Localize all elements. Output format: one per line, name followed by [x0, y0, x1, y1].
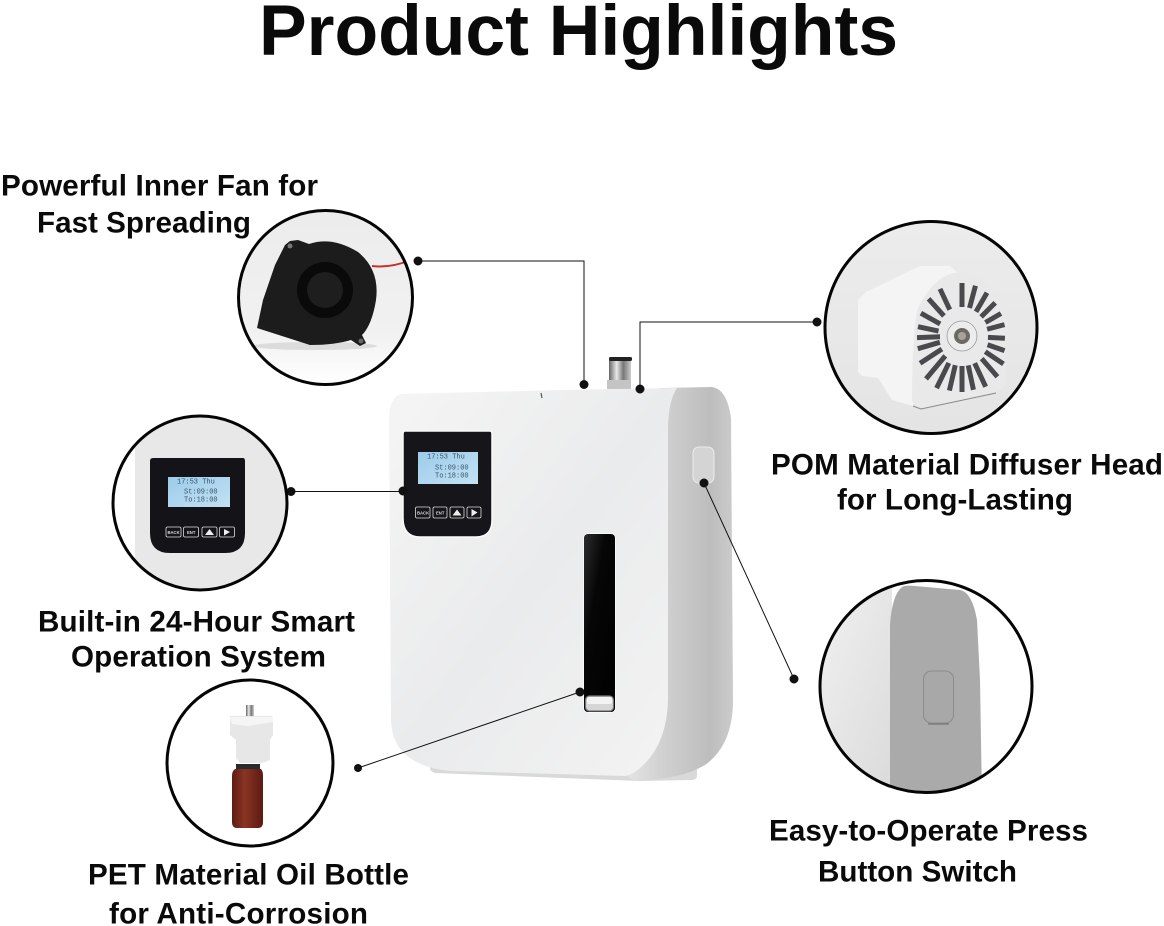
product: scent diffuser machine	[389, 357, 733, 781]
label: smart operation system: Built-in 24-Hour Smart	[38, 606, 355, 638]
control panel: BACK	[417, 510, 429, 516]
icon: control panel circle: ENT	[187, 530, 196, 535]
label: diffuser head	[771, 448, 1163, 516]
bottle assembly	[230, 705, 273, 828]
top seam mark	[541, 393, 542, 398]
label: oil bottle: PET Material Oil Bottle	[88, 858, 409, 892]
front face	[389, 388, 677, 776]
icon: control panel circle: BACK	[168, 530, 180, 535]
label: smart operation system: Operation System	[71, 640, 326, 674]
connector: diffuser head to nozzle	[636, 318, 821, 393]
label: diffuser head: for Long-Lasting	[837, 484, 1073, 516]
icon: oil bottle circle	[167, 680, 333, 846]
control panel	[403, 431, 492, 537]
label: oil bottle	[88, 858, 409, 926]
icon: press button switch circle	[810, 575, 1032, 800]
icon: control panel circle: 17:53 Thu	[177, 478, 215, 486]
base shadow line	[913, 393, 996, 409]
slotted face	[912, 272, 960, 402]
head body	[858, 266, 960, 406]
metal air nozzle	[607, 357, 632, 389]
icon: blower fan circle	[238, 210, 412, 384]
connector: control system to panel	[287, 487, 407, 496]
label: press button: Easy-to-Operate Press	[769, 814, 1088, 848]
label: inner fan: Fast Spreading	[37, 206, 251, 240]
connector: oil bottle to window	[354, 688, 584, 772]
side wall	[620, 387, 733, 780]
control panel: To:18:00	[435, 472, 469, 480]
oil level window	[583, 533, 616, 713]
radial slots	[917, 283, 1005, 392]
label: press button	[769, 814, 1088, 888]
rubber feet	[430, 766, 697, 781]
label: inner fan: Powerful Inner Fan for	[1, 170, 318, 202]
icon: control panel circle: To:18:00	[184, 496, 218, 504]
icon: POM diffuser head circle	[825, 222, 1037, 434]
icon: control panel circle	[112, 414, 288, 592]
label: smart operation system	[38, 606, 355, 674]
red wire	[372, 261, 408, 266]
control panel: ENT	[436, 510, 445, 516]
control panel: 17:53 Thu	[427, 454, 465, 462]
label: press button: Button Switch	[818, 856, 1017, 888]
control panel: St:09:00	[435, 464, 469, 472]
connector: fan to top of machine	[414, 257, 588, 388]
floor shadow	[253, 342, 377, 350]
label: inner fan	[1, 170, 318, 240]
fan housing	[257, 240, 377, 346]
side push button	[693, 447, 714, 483]
label: diffuser head: POM Material Diffuser Head	[771, 448, 1163, 482]
connector: press button to side switch	[700, 479, 798, 683]
icon: control panel circle: St:09:00	[184, 488, 218, 496]
